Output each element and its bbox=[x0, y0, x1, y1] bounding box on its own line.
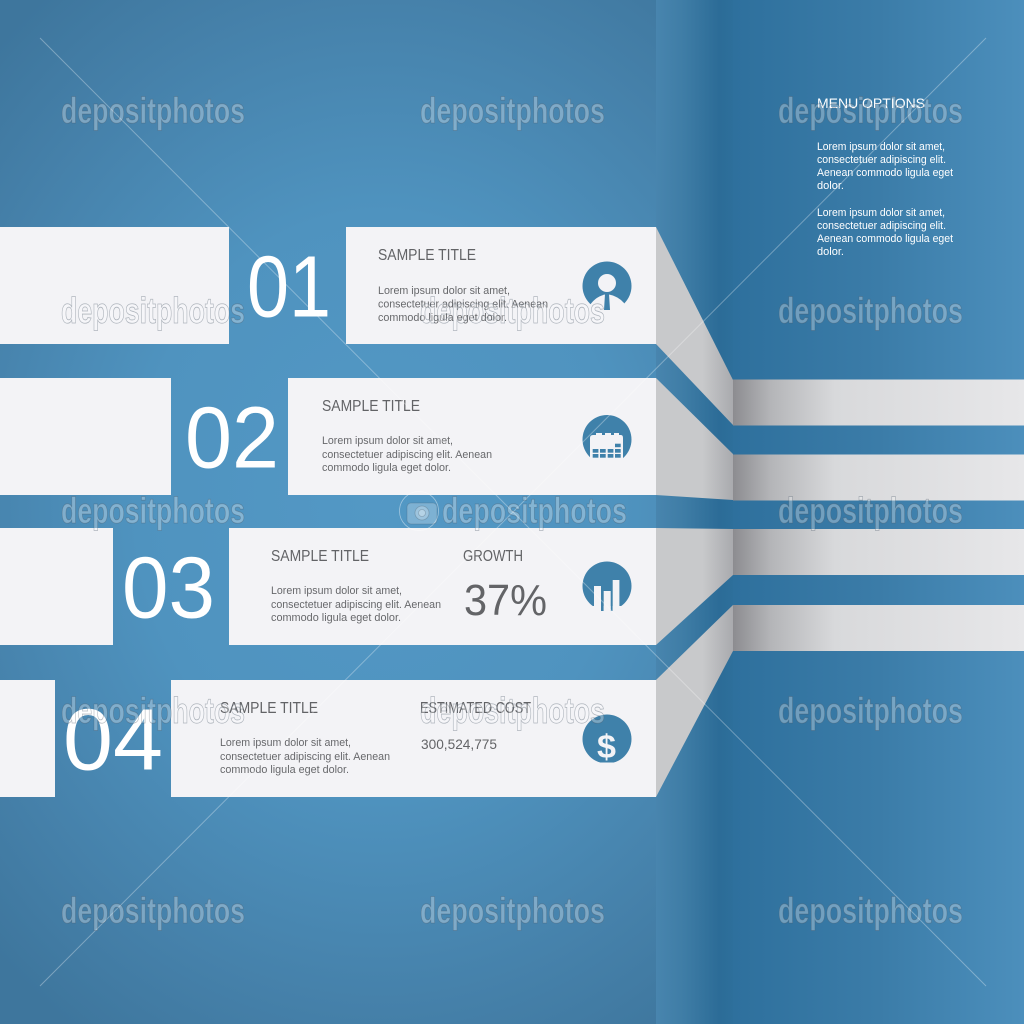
menu paragraph 2 bbox=[817, 207, 953, 258]
background: right page bbox=[733, 0, 1024, 1024]
card 4 title: SAMPLE TITLE bbox=[220, 700, 318, 717]
watermark text: depositphotos bbox=[420, 90, 605, 131]
left bar 1 bbox=[0, 227, 229, 344]
watermark text: depositphotos bbox=[61, 490, 245, 531]
icon: dollar bbox=[582, 714, 632, 766]
card 3 body: commodo ligula eget dolor. bbox=[271, 612, 401, 624]
menu paragraph 1: Lorem ipsum dolor sit amet, bbox=[817, 141, 945, 153]
watermark text: depositphotos bbox=[61, 690, 245, 731]
card 1 bbox=[346, 227, 656, 344]
watermark text: depositphotos bbox=[420, 890, 605, 931]
menu paragraph 2: Lorem ipsum dolor sit amet, bbox=[817, 207, 945, 219]
watermark camera icon bbox=[400, 492, 438, 530]
menu paragraph 2: consectetuer adipiscing elit. bbox=[817, 220, 946, 232]
background: fold band bbox=[656, 0, 733, 1024]
estimated cost label: ESTIMATED COST bbox=[420, 700, 531, 717]
number 03: 03 bbox=[122, 540, 215, 636]
estimated cost value: 300,524,775 bbox=[421, 736, 497, 752]
card 3 body: consectetuer adipiscing elit. Aenean bbox=[271, 599, 441, 611]
card 3 body bbox=[271, 585, 441, 624]
card 1 title: SAMPLE TITLE bbox=[378, 247, 476, 264]
menu heading: MENU OPTIONS bbox=[817, 95, 925, 111]
folded connectors bbox=[656, 227, 733, 797]
menu paragraph 1: dolor. bbox=[817, 180, 844, 192]
left bar 2 bbox=[0, 378, 171, 495]
watermark text bbox=[61, 90, 963, 931]
card 2 body: commodo ligula eget dolor. bbox=[322, 462, 451, 474]
card 3 bbox=[229, 528, 656, 645]
card 1 body: consectetuer adipiscing elit. Aenean bbox=[378, 298, 548, 310]
card 1 body bbox=[378, 285, 548, 324]
growth label: GROWTH bbox=[463, 548, 523, 565]
menu paragraph 1: consectetuer adipiscing elit. bbox=[817, 154, 946, 166]
card 2 bbox=[288, 378, 656, 495]
growth value: 37% bbox=[464, 576, 547, 625]
panel: row 1 bbox=[0, 227, 656, 344]
menu paragraph 2: dolor. bbox=[817, 246, 844, 258]
watermark text: depositphotos bbox=[61, 290, 245, 331]
number 02: 02 bbox=[185, 390, 279, 486]
icon: calendar bbox=[582, 415, 632, 466]
number 01: 01 bbox=[247, 238, 331, 336]
number 04: 04 bbox=[63, 692, 163, 788]
card 1 body: Lorem ipsum dolor sit amet, bbox=[378, 285, 510, 297]
panel: row 2 bbox=[0, 378, 656, 495]
right stripes bbox=[733, 380, 1024, 651]
card 4 body: Lorem ipsum dolor sit amet, bbox=[220, 737, 351, 749]
menu paragraph 1: Aenean commodo ligula eget bbox=[817, 167, 953, 179]
watermark text: depositphotos bbox=[778, 290, 963, 331]
panel: row 4 bbox=[0, 680, 656, 797]
card 4 body: consectetuer adipiscing elit. Aenean bbox=[220, 751, 390, 763]
card 3 title: SAMPLE TITLE bbox=[271, 548, 369, 565]
card 2 body bbox=[322, 435, 492, 474]
card 3 body: Lorem ipsum dolor sit amet, bbox=[271, 585, 402, 597]
icon: dollar: $ bbox=[597, 728, 616, 765]
watermark text: depositphotos bbox=[778, 90, 963, 131]
left bar 4 bbox=[0, 680, 55, 797]
card 4 bbox=[171, 680, 656, 797]
card 2 title: SAMPLE TITLE bbox=[322, 398, 420, 415]
watermark text: depositphotos bbox=[420, 290, 605, 331]
watermark text: depositphotos bbox=[61, 890, 245, 931]
card 4 body bbox=[220, 737, 390, 776]
watermark text: depositphotos bbox=[420, 690, 605, 731]
watermark text: depositphotos bbox=[61, 90, 245, 131]
watermark text: depositphotos bbox=[778, 890, 963, 931]
card 2 body: consectetuer adipiscing elit. Aenean bbox=[322, 449, 492, 461]
card 1 body: commodo ligula eget dolor. bbox=[378, 312, 507, 324]
watermark text: depositphotos bbox=[442, 490, 627, 531]
card 2 body: Lorem ipsum dolor sit amet, bbox=[322, 435, 453, 447]
left bar 3 bbox=[0, 528, 113, 645]
panel: row 3 bbox=[0, 528, 656, 645]
watermark text: depositphotos bbox=[778, 690, 963, 731]
icon: bar chart bbox=[582, 562, 632, 612]
menu paragraph 2: Aenean commodo ligula eget bbox=[817, 233, 953, 245]
menu options text bbox=[817, 95, 953, 258]
card 4 body: commodo ligula eget dolor. bbox=[220, 764, 349, 776]
background: left page bbox=[0, 0, 656, 1024]
watermark text: depositphotos bbox=[778, 490, 963, 531]
menu paragraph 1 bbox=[817, 141, 953, 192]
icon: person bbox=[582, 262, 632, 311]
